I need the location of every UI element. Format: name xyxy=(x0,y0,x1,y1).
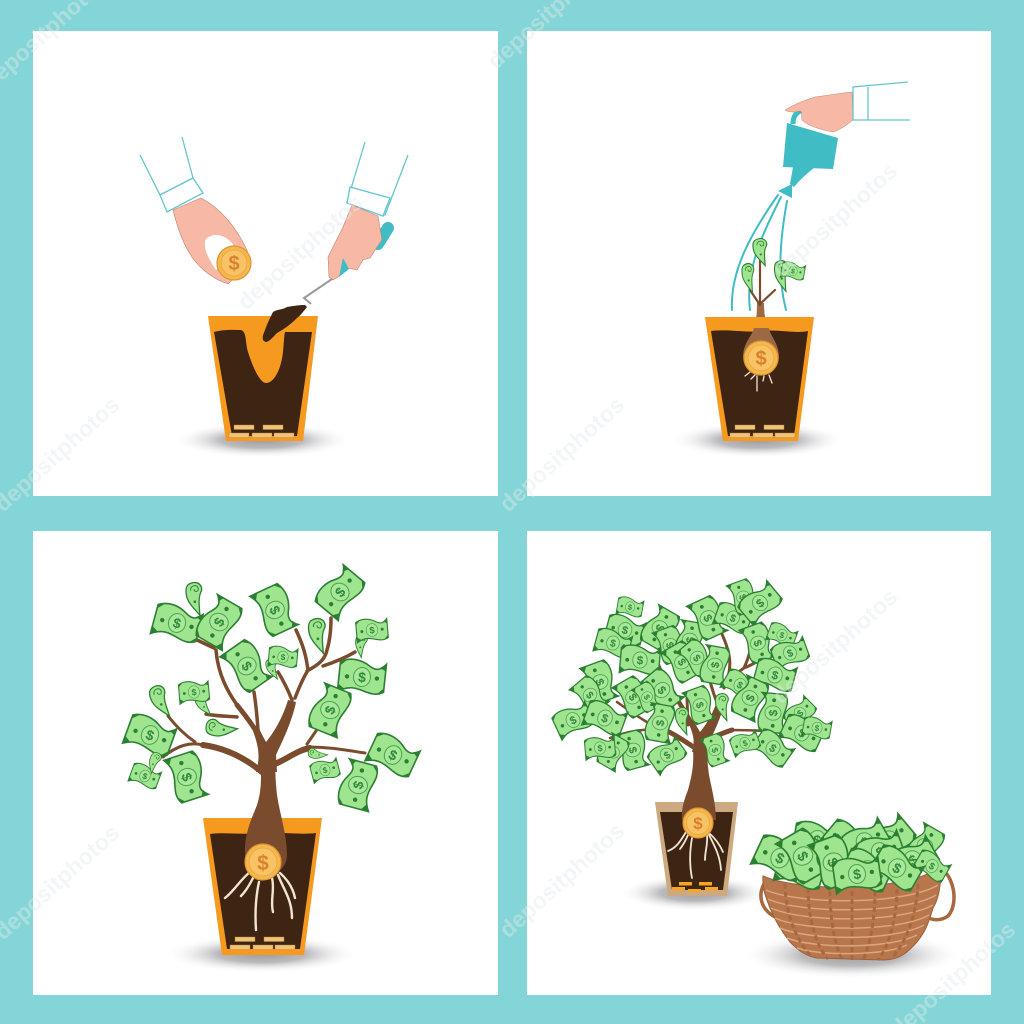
orange pot xyxy=(203,818,322,955)
tan pot xyxy=(655,802,738,896)
money leaves xyxy=(551,578,832,775)
left hand with coin xyxy=(140,137,251,284)
pile of money in basket: $ xyxy=(882,831,898,849)
pile of money in basket: $ xyxy=(906,851,921,869)
coin: $ xyxy=(228,253,240,275)
watermarks: depositphotos xyxy=(767,583,902,709)
pile of money in basket: $ xyxy=(793,849,811,864)
money leaves: $ xyxy=(171,614,183,632)
money leaves: $ xyxy=(709,746,720,754)
money leaves: $ xyxy=(141,771,149,782)
money leaves: $ xyxy=(814,723,820,733)
watermarks: depositphotos xyxy=(767,157,902,283)
money leaves: $ xyxy=(357,669,367,685)
pile of money in basket: $ xyxy=(852,866,862,882)
money leaves: $ xyxy=(770,668,780,683)
watering can xyxy=(778,110,838,198)
money leaves: $ xyxy=(642,692,653,702)
pile of money in basket: $ xyxy=(839,835,855,853)
coin and roots: $ xyxy=(257,852,269,875)
watermarks: depositphotos xyxy=(494,391,629,517)
money leaves: $ xyxy=(685,635,698,644)
money leaves: $ xyxy=(753,595,767,611)
coin xyxy=(217,246,251,280)
pile of money in basket: $ xyxy=(823,856,841,869)
basket shadow xyxy=(740,931,964,979)
watermarks: depositphotos xyxy=(494,817,629,943)
basket handles xyxy=(761,870,954,920)
money leaves: $ xyxy=(599,711,611,726)
panel: young money tree xyxy=(33,531,498,995)
pile of money in basket: $ xyxy=(812,831,822,849)
sapling: $ xyxy=(790,268,795,276)
money leaves: $ xyxy=(608,637,617,650)
money leaves: $ xyxy=(655,718,668,727)
panel: grown tree and basket xyxy=(527,531,991,995)
money leaves: $ xyxy=(386,746,400,764)
money leaves: $ xyxy=(321,703,339,717)
money leaves: $ xyxy=(693,700,706,710)
money leaves: $ xyxy=(625,692,639,704)
pile of money in basket: $ xyxy=(890,859,905,877)
money leaves: $ xyxy=(191,687,197,697)
money leaves: $ xyxy=(583,689,596,702)
pile of money in basket: $ xyxy=(860,861,874,879)
money leaves: $ xyxy=(785,647,795,660)
money leaves: $ xyxy=(369,625,376,637)
pile of money in basket: $ xyxy=(926,861,937,873)
money leaves: $ xyxy=(654,683,670,697)
money leaves: $ xyxy=(592,677,608,688)
money leaves: $ xyxy=(625,746,639,756)
money leaves xyxy=(123,564,421,812)
pot shadow xyxy=(670,422,846,458)
pile of money in basket: $ xyxy=(772,850,787,868)
pot shadow xyxy=(164,935,360,973)
money leaves: $ xyxy=(663,640,676,650)
money leaves: $ xyxy=(321,764,329,775)
pile of money in basket: $ xyxy=(858,833,873,851)
money leaves: $ xyxy=(766,709,781,717)
money leaves: $ xyxy=(210,614,228,629)
coin and roots xyxy=(668,808,723,878)
sapling xyxy=(742,239,806,332)
money leaves: $ xyxy=(620,624,630,638)
money leaves: $ xyxy=(734,680,745,692)
money leaves: $ xyxy=(728,612,738,625)
wicker basket xyxy=(763,868,941,960)
money leaves: $ xyxy=(795,708,806,719)
hand holding can xyxy=(785,82,910,132)
money leaves: $ xyxy=(662,749,673,762)
tree trunk and branches xyxy=(163,618,365,876)
pot with coin xyxy=(705,317,814,441)
money leaves: $ xyxy=(178,771,196,783)
money leaves: $ xyxy=(349,779,367,791)
money leaves: $ xyxy=(796,725,808,741)
money leaves: $ xyxy=(568,714,579,728)
money leaves: $ xyxy=(280,652,286,662)
coin and roots xyxy=(225,844,295,930)
pile of money in basket: $ xyxy=(874,843,887,861)
pile of money in basket: $ xyxy=(794,861,806,879)
panel: planting the coin xyxy=(33,31,498,496)
pot shadow xyxy=(619,875,771,911)
pot with coin: $ xyxy=(755,348,767,370)
orange pot xyxy=(208,316,318,441)
panel: watering xyxy=(527,31,991,496)
coin and roots: $ xyxy=(693,814,703,833)
right hand with trowel xyxy=(263,142,408,342)
money leaves: $ xyxy=(608,747,620,758)
money leaves: $ xyxy=(627,602,634,612)
money leaves: $ xyxy=(750,638,764,649)
money leaves: $ xyxy=(742,692,758,704)
money leaves: $ xyxy=(710,660,723,669)
money leaves: $ xyxy=(700,612,716,624)
water streams xyxy=(732,195,787,310)
money leaves: $ xyxy=(736,593,748,602)
tree trunk and branches xyxy=(610,630,785,820)
pot shadow xyxy=(172,422,352,458)
money leaves: $ xyxy=(778,630,786,641)
pile of money in basket: $ xyxy=(917,839,933,852)
watermarks: depositphotos xyxy=(232,189,367,315)
money leaves: $ xyxy=(597,743,603,753)
money leaves: $ xyxy=(238,658,256,674)
money leaves: $ xyxy=(266,603,284,617)
money leaves: $ xyxy=(636,653,644,668)
pile of money in basket xyxy=(751,812,952,895)
money leaves: $ xyxy=(741,737,749,748)
money leaves: $ xyxy=(766,742,779,756)
money leaves: $ xyxy=(331,584,349,600)
money leaves: $ xyxy=(690,652,703,665)
money leaves: $ xyxy=(652,621,668,634)
money leaves: $ xyxy=(144,726,157,744)
money leaves: $ xyxy=(674,657,688,669)
